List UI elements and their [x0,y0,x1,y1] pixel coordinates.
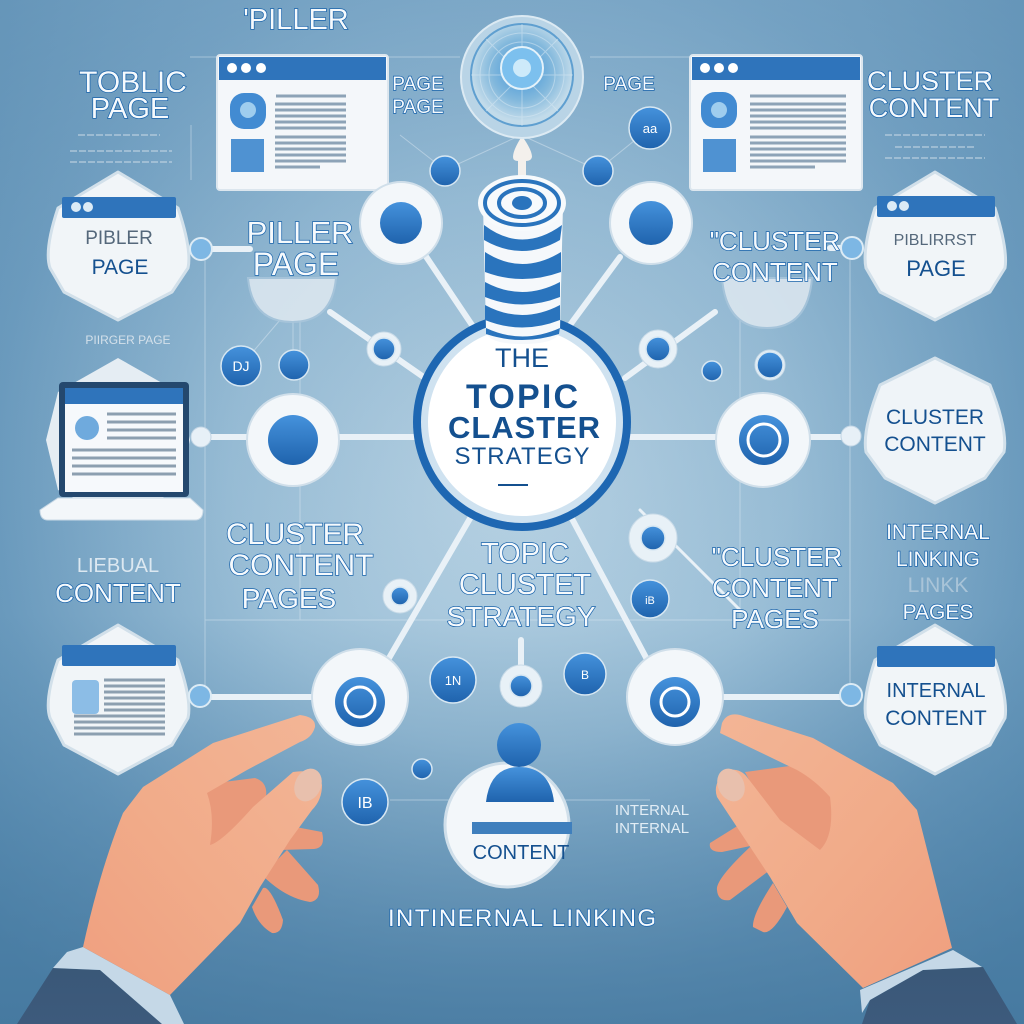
caption: piller page small: PIIRGER PAGE [85,333,171,347]
label: page pair: PAGE [392,74,444,95]
panel: right browser window [690,55,862,190]
faint text right [885,135,985,158]
label: toblic page: PAGE [91,93,169,125]
label: cluster content mid right: CONTENT [712,257,838,287]
title [448,343,600,486]
shield: bottom right: INTERNAL [887,680,985,702]
heading: piller: 'PILLER [243,4,349,36]
shield: top right: PAGE [906,256,966,281]
small circle icons: DJ [232,358,250,374]
label: cluster content pages left: PAGES [242,583,336,614]
label: topic cluster strategy: STRATEGY [447,601,596,632]
thin grid lines [190,57,860,800]
label: internal linking right [886,521,990,624]
label: page pair: PAGE [392,97,444,118]
label: page pair: PAGE [603,74,655,95]
label: internal linking right: LINKK [908,574,968,597]
small circle icons [221,107,785,825]
shield: cluster content right: CLUSTER [886,406,984,429]
shield: cluster content right: CONTENT [884,433,986,456]
label: internal small: INTERNAL [615,820,689,837]
label: internal linking right: LINKING [896,548,980,571]
label: cluster content pages left: CLUSTER [226,518,364,551]
label: cluster content pages right [712,542,842,634]
label: cluster content pages left: CONTENT [228,549,374,582]
small circle icons: aa [643,121,658,136]
label: cluster content top right [867,66,999,123]
connector lines [205,248,850,697]
label: cluster content pages right: CONTENT [712,573,838,603]
label: toblic page: TOBLIC [79,66,187,99]
label: internal small: INTERNAL [615,802,689,819]
semicircle panels behind labels [248,278,812,328]
panel: left browser window [217,55,388,190]
label: internal content left: CONTENT [55,578,181,608]
label: cluster content pages right: "CLUSTER [712,542,842,572]
shield: top left: PAGE [92,256,148,279]
label: internal content left [55,555,181,608]
small circle icons: B [581,668,589,682]
label: cluster content mid right: "CLUSTER [710,226,840,256]
label: cluster content top right: CONTENT [869,93,999,123]
title: TOPIC [466,378,578,416]
title: CLASTER [448,410,600,445]
label: internal linking right: INTERNAL [886,521,990,544]
label: internal content left: LIEBUAL [77,555,159,577]
small circle icons: 1N [445,673,461,688]
arrow to orb [513,136,532,176]
label: cluster content pages left [226,518,374,614]
label: internal linking: INTINERNAL LINKING [388,905,656,932]
label: internal linking right: PAGES [903,601,973,624]
faint text left [70,135,172,162]
title: STRATEGY [454,443,590,470]
small circle icons: iB [645,595,655,607]
shield: bottom left [48,625,211,774]
label: topic cluster strategy [447,538,596,632]
label: topic cluster strategy: TOPIC [481,538,569,570]
left hand [17,715,327,1024]
shield: top right [841,172,1006,320]
label: internal small [615,802,689,837]
tower [478,175,566,344]
center circle [413,313,631,531]
shield: top left [48,172,212,320]
label: cluster content top right: CLUSTER [867,66,993,96]
nodes [247,182,810,745]
label: cluster content pages right: PAGES [731,604,819,634]
label: cluster content mid right [710,226,840,287]
shield: cluster content right [841,358,1005,503]
shield: top right: PIBLIRRST [894,232,977,249]
panel: laptop [40,358,211,520]
label: toblic page [79,66,187,125]
title: THE [495,343,549,373]
bottom content badge: CONTENT [473,842,569,864]
bottom content badge [445,723,572,887]
label: piller page [247,215,353,282]
label: piller page: PAGE [253,246,339,282]
shield: bottom right [840,625,1006,774]
icon: top orb [461,16,583,138]
label: page pair [392,74,655,118]
small circle icons: IB [357,795,373,812]
right hand [710,714,1017,1024]
label: piller page: PILLER [247,215,353,250]
label: topic cluster strategy: CLUSTET [459,569,591,601]
shield: top left: PIBLER [85,228,153,249]
shield: bottom right: CONTENT [885,707,987,730]
